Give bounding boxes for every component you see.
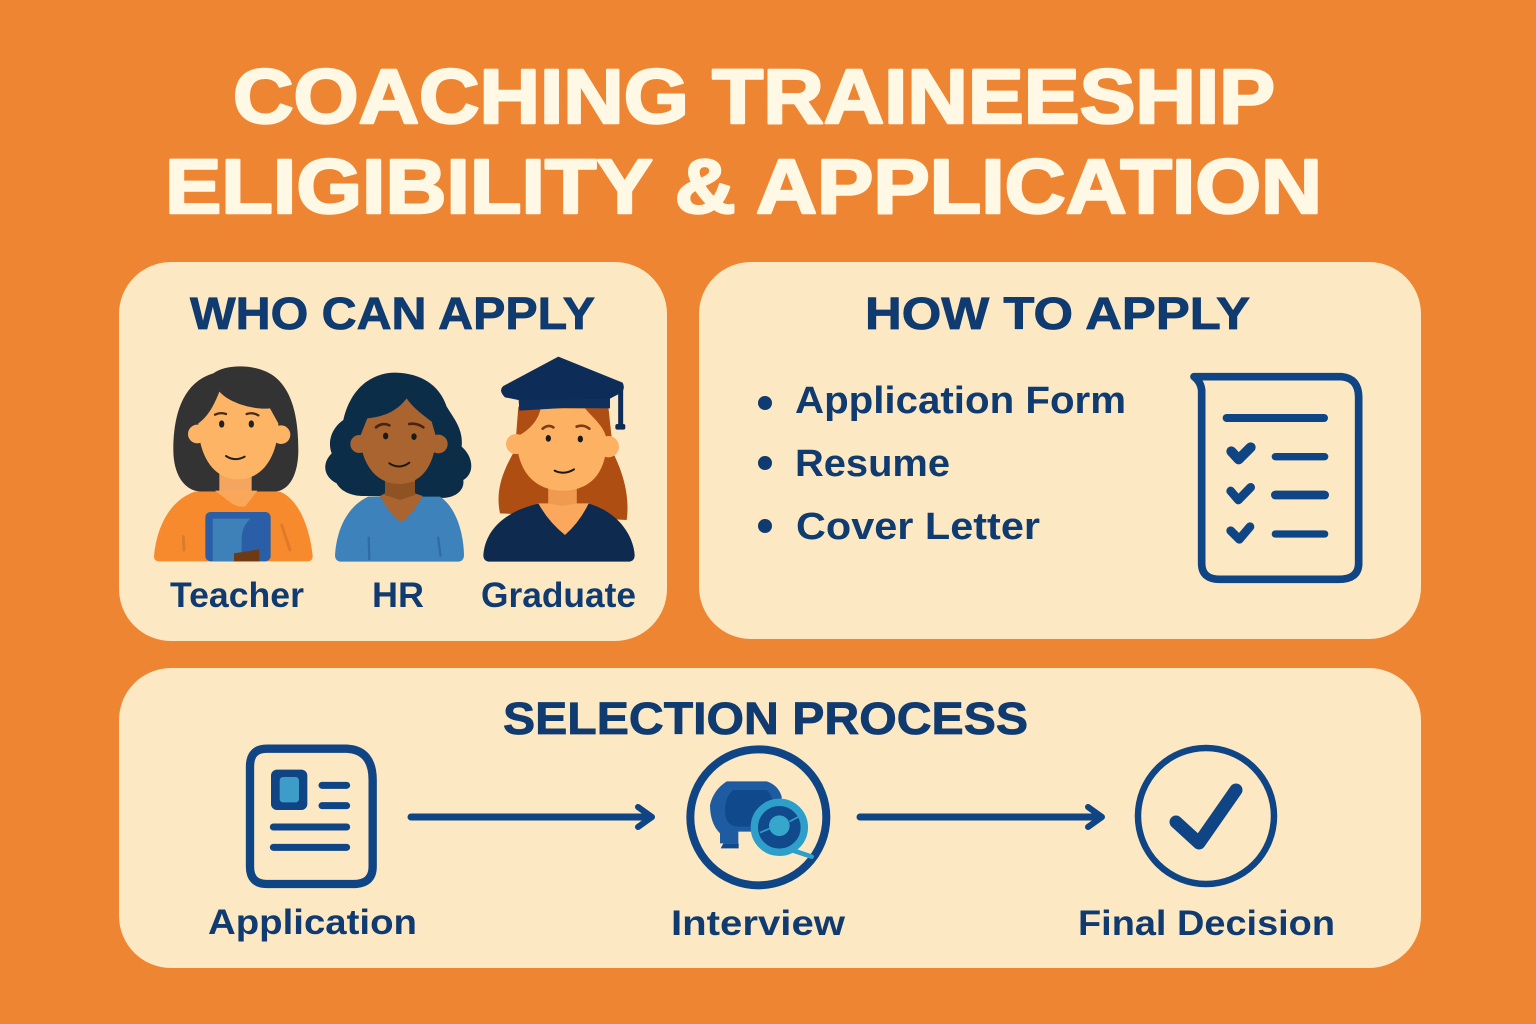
requirements list: Application Form: [795, 380, 1126, 422]
title: COACHING TRAINEESHIP: [233, 54, 1275, 140]
label: teacher: Teacher: [170, 576, 304, 615]
requirements list: Resume: [795, 443, 950, 485]
panel: selection process: [119, 668, 1421, 968]
requirements list: Cover Letter: [796, 506, 1040, 548]
heading: who can apply: WHO CAN APPLY: [190, 288, 595, 339]
label: HR: HR: [372, 576, 424, 615]
label: graduate: Graduate: [481, 576, 636, 615]
figure: teacher: [154, 366, 313, 561]
title: ELIGIBILITY & APPLICATION: [165, 144, 1322, 230]
label: application: Application: [208, 903, 417, 942]
icon: final decision check: [1138, 748, 1274, 884]
icon: checklist: [1194, 377, 1359, 579]
arrow: interview to final decision: [860, 807, 1102, 827]
icon: application document: [250, 749, 373, 884]
label: final decision: Final Decision: [1078, 904, 1335, 943]
figure: HR: [325, 373, 471, 562]
heading: how to apply: HOW TO APPLY: [865, 288, 1250, 339]
panel: who can apply: [119, 262, 667, 641]
label: interview: Interview: [671, 904, 846, 943]
icon: interview: [690, 749, 826, 885]
title: [165, 54, 1322, 230]
requirements list: [758, 380, 1126, 548]
panel: how to apply: [699, 262, 1421, 639]
arrow: application to interview: [411, 807, 652, 827]
figure: graduate: [483, 357, 635, 562]
heading: selection process: SELECTION PROCESS: [503, 693, 1028, 744]
